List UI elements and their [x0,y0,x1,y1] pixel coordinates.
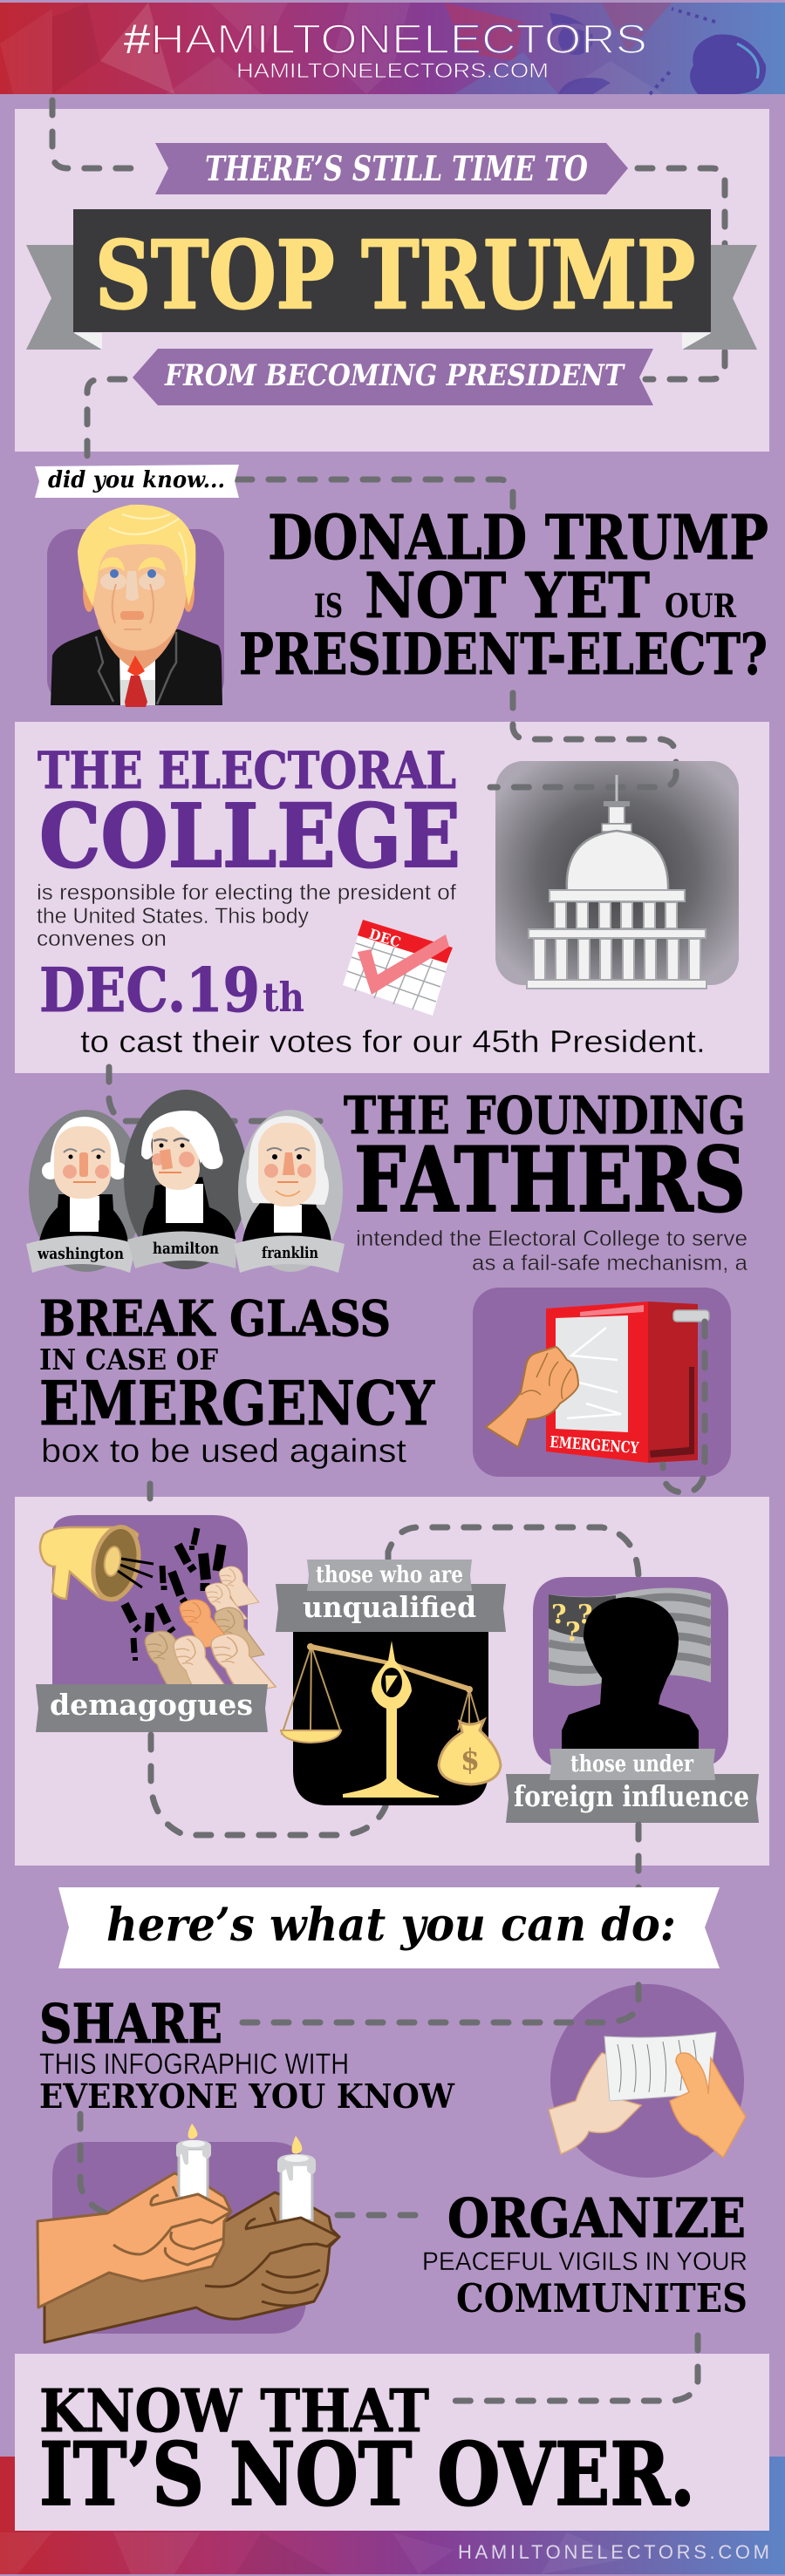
heading: break glass in case of emergency [39,1290,435,1439]
text: share this infographic: SHARE [39,1992,222,2056]
headline: donald trump is not yet our president-elect: OUR [665,587,736,625]
headline: donald trump is not yet our president-elect: NOT YET [365,559,650,632]
right candle [277,2136,316,2220]
headline: donald trump is not yet our president-elect [239,501,768,688]
connector dashes: candles to organize [338,2212,420,2218]
connector dashes: organize to conclusion [451,2335,698,2401]
connector dashes: to demagogues [147,1484,154,1515]
portrait: washington [29,1110,144,1272]
heading: the electoral college: COLLEGE [39,785,461,887]
heading: know that it's not over [39,2376,695,2525]
icon: founding fathers portraits [26,1090,345,1273]
icon: emergency box [473,1288,731,1492]
icon: foreign influence silhouette: ? [551,1600,567,1630]
label: hamilton [127,1231,236,1268]
label: demagogues: demagogues [50,1688,253,1722]
text: share this infographic: EVERYONE YOU KNOW [39,2076,455,2116]
icon: megaphone and crowd [40,1515,276,1695]
dark hand [44,2192,339,2342]
footer url: HAMILTONELECTORS.COM [458,2541,769,2563]
icon: foreign influence silhouette: ? [577,1600,593,1630]
text: responsible for electing: convenes on [37,927,167,951]
icon: scales and money bag: $ [461,1743,480,1777]
panel: stop trump background [15,109,769,452]
date: dec 19th: th [263,974,304,1021]
header hashtag: #HAMILTONELECTORS [124,16,647,62]
icon: emergency box: EMERGENCY [550,1433,640,1458]
heading: break glass in case of emergency: BREAK GLASS [39,1290,391,1348]
label: hamilton: hamilton [153,1240,219,1258]
header url: HAMILTONELECTORS.COM [236,59,549,83]
text: intended the electoral college [356,1227,747,1275]
connector dashes: to founding fathers [109,1067,320,1121]
label: those under foreign influence [506,1749,759,1823]
banner: from becoming president [133,349,653,405]
heading: know that it's not over: KNOW THAT [39,2376,429,2445]
panel: against background [15,1497,769,1866]
icon: capitol [490,761,739,989]
icon: calendar with check: DEC [367,926,403,951]
icon: hands holding candles [38,2124,339,2342]
banner: there's still time to [155,143,628,194]
text: intended the electoral college: intended the Electoral College to serve [356,1227,747,1251]
label: franklin [234,1236,345,1273]
text: responsible for electing [37,880,456,951]
connector dashes: did you know to capitol [237,479,676,787]
icon: calendar with check [343,920,453,1016]
panel: it's not over [15,2354,769,2531]
label: those who are unqualified: those who are [316,1562,463,1588]
connector dashes: into capitol panel [513,693,676,771]
ribbon: here's what you can do: here’s what you can do: [106,1899,676,1952]
heading: the electoral college [38,741,461,887]
icon: trump portrait [47,505,224,707]
label: franklin: franklin [262,1244,318,1262]
text: organize peaceful vigils [422,2186,747,2321]
label: those under foreign influence: foreign influence [514,1779,749,1813]
header band [0,3,785,94]
raised fists [145,1567,276,1695]
text: box to be used against: box to be used against [41,1433,406,1470]
ribbon: stop trump [26,209,757,350]
text: share this infographic [39,1992,455,2116]
text: organize peaceful vigils: COMMUNITES [456,2275,747,2321]
headline: donald trump is not yet our president-elect: IS [314,587,343,625]
text: to cast their votes: to cast their votes for our 45th President. [80,1023,706,1059]
ribbon: did you know: did you know... [48,467,225,493]
label: demagogues [36,1684,268,1732]
icon: scales and money bag [281,1630,501,1805]
icon: foreign influence silhouette [533,1577,728,1768]
heading: the founding fathers [344,1085,746,1233]
icon: candle background [52,2142,306,2334]
heading: break glass in case of emergency: EMERGENCY [39,1369,435,1439]
portrait: hamilton [124,1090,248,1269]
label: those who are unqualified [276,1560,506,1632]
footer band [0,2457,785,2574]
text: responsible for electing: is responsible for electing the president of [37,880,456,905]
label: those who are unqualified: unqualified [303,1590,476,1624]
heading: break glass in case of emergency: IN CASE OF [39,1342,218,1376]
banner: there's still time to: THERE’S STILL TIME TO [205,149,588,189]
left candle [176,2124,211,2198]
text: responsible for electing: the United States. This body [37,904,309,928]
label: washington: washington [37,1245,124,1263]
connector dashes: title [52,100,725,475]
label: those under foreign influence: those under [570,1751,693,1777]
connector dashes: demagogues to scales to foreign influence [151,1527,638,1835]
text: intended the electoral college: as a fail-safe mechanism, a [472,1251,747,1275]
portrait: franklin [238,1110,343,1272]
connector dashes: to candles [80,2114,109,2214]
ribbon: here's what you can do [58,1887,720,1968]
icon: foreign influence silhouette: ? [565,1617,581,1648]
date: dec 19th: DEC.19 [39,955,260,1026]
text: share this infographic: THIS INFOGRAPHIC WITH [39,2048,349,2081]
label: washington [26,1236,136,1273]
connector dashes: foreign influence to action ribbon [635,1825,642,1890]
exclamation marks [125,1528,222,1661]
connector dashes: share [242,1981,638,2022]
text: organize peaceful vigils: ORGANIZE [447,2186,746,2250]
heading: the electoral college: THE ELECTORAL [38,741,456,800]
text: organize peaceful vigils: PEACEFUL VIGILS IN YOUR [422,2247,747,2276]
icon: circle with hands passing paper [242,1981,746,2178]
banner: from becoming president: FROM BECOMING PRESIDENT [164,358,625,393]
panel: electoral college background [15,722,769,1073]
megaphone [40,1523,154,1603]
light hand [38,2173,231,2308]
